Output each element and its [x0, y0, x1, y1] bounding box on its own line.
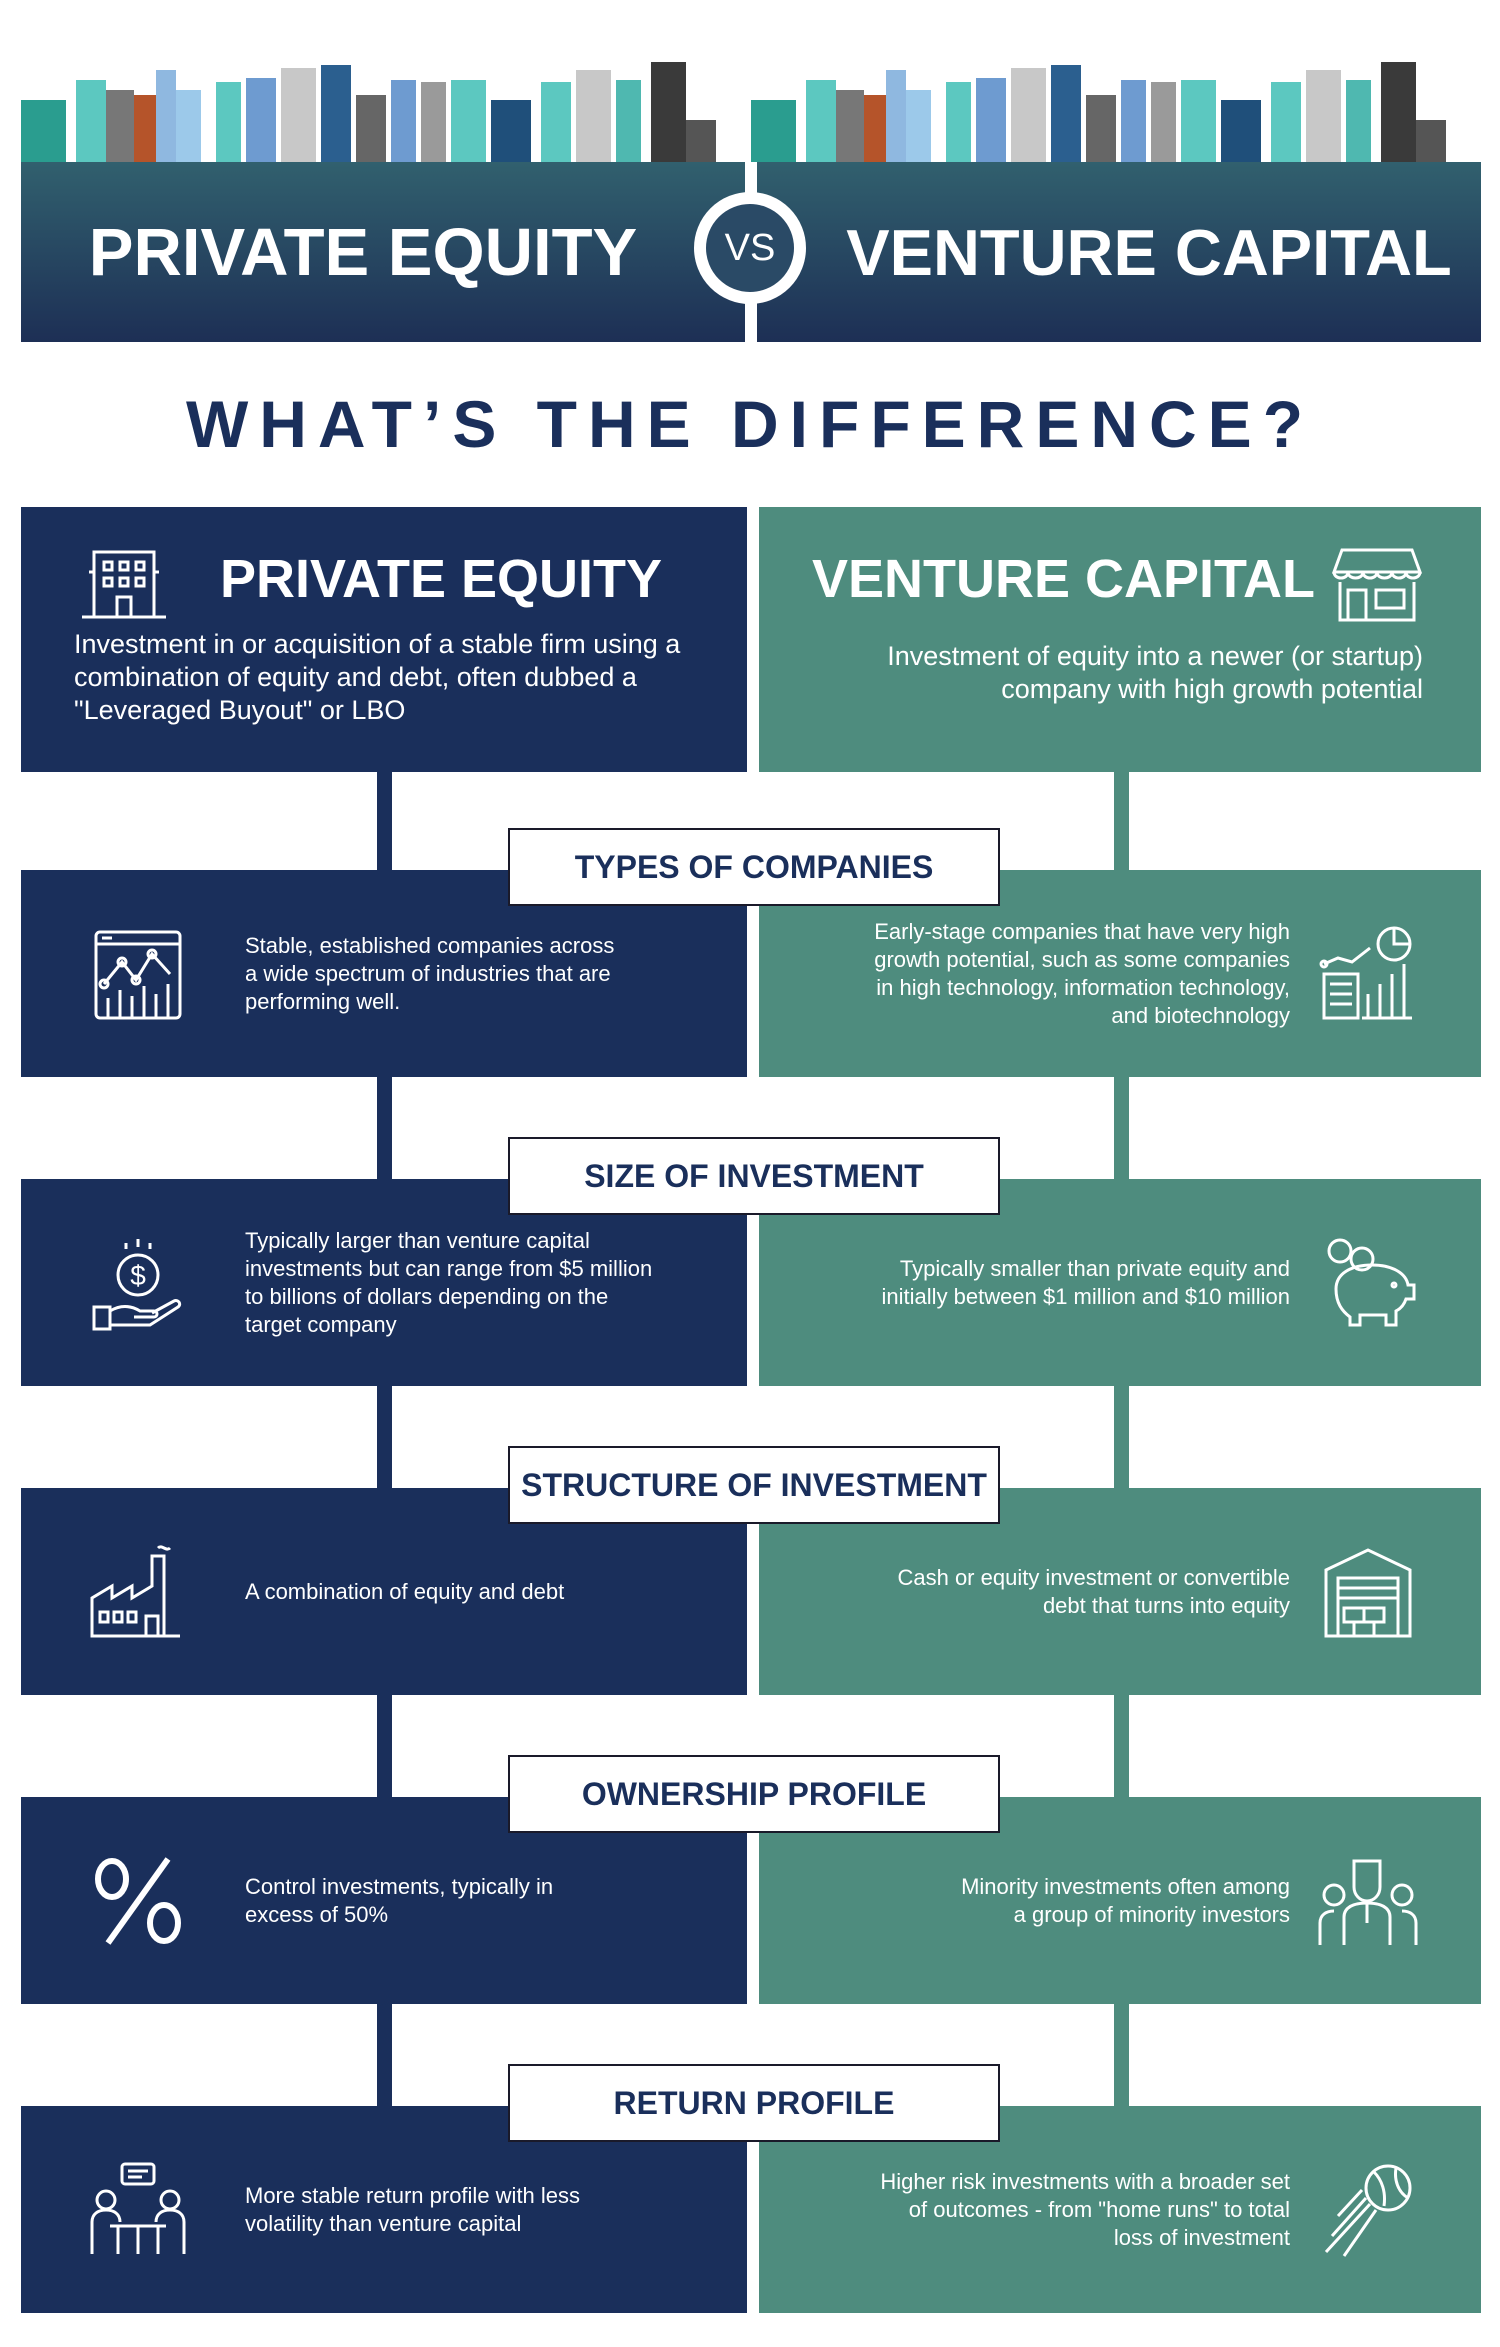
text: performing well. [245, 988, 400, 1014]
icon: analytics dashboard [94, 930, 182, 1020]
banner right: venture capital [757, 162, 1481, 342]
panel: private equity intro [21, 507, 747, 772]
panel: PE return [21, 2106, 747, 2313]
text [882, 1256, 1290, 1308]
icon: office building [82, 550, 166, 618]
heading: WHAT’S THE DIFFERENCE? [186, 387, 1314, 461]
icon: hand with coin [92, 1239, 182, 1330]
description: Investment of equity into a newer (or startup) [887, 641, 1423, 671]
text: to billions of dollars depending on the [245, 1284, 608, 1308]
label: TYPES OF COMPANIES [575, 848, 933, 884]
panel: VC return [759, 2106, 1481, 2313]
panel: venture capital intro [759, 507, 1481, 772]
panel: PE types [21, 870, 747, 1077]
title: VENTURE CAPITAL [812, 549, 1315, 609]
label [508, 1137, 1000, 1215]
icon: group of people [1318, 1860, 1418, 1945]
text [245, 932, 614, 1014]
connectors [377, 770, 392, 2110]
text: Minority investments often among [961, 1874, 1290, 1898]
text: Early-stage companies that have very high [874, 918, 1290, 944]
section: types of companies [21, 828, 1481, 1077]
icon: factory [90, 1545, 180, 1638]
icon: growth chart [1320, 926, 1412, 1020]
text: debt that turns into equity [1043, 1592, 1290, 1618]
text: Higher risk investments with a broader set [880, 2168, 1290, 2194]
text: initially between $1 million and $10 million [882, 1284, 1290, 1308]
panel: PE structure [21, 1488, 747, 1695]
section: return profile [21, 2064, 1481, 2313]
text: Typically smaller than private equity and [900, 1256, 1290, 1280]
text: volatility than venture capital [245, 2210, 521, 2236]
label [508, 1755, 1000, 1833]
text: a group of minority investors [1014, 1902, 1290, 1926]
description: Investment in or acquisition of a stable firm using a [74, 629, 680, 659]
label: SIZE OF INVESTMENT [584, 1158, 924, 1194]
text [245, 2182, 580, 2236]
text [874, 918, 1290, 1028]
section: ownership profile [21, 1755, 1481, 2004]
banner right: venture capital: VENTURE CAPITAL [846, 216, 1452, 288]
text: and biotechnology [1111, 1002, 1290, 1028]
panel: PE size [21, 1179, 747, 1386]
label: STRUCTURE OF INVESTMENT [521, 1466, 987, 1502]
section: size of investment [21, 1137, 1481, 1386]
text: in high technology, information technology, [876, 974, 1290, 1000]
icon: meeting [90, 2162, 186, 2254]
icon: percent [95, 1857, 181, 1945]
label: OWNERSHIP PROFILE [582, 1776, 926, 1812]
title: PRIVATE EQUITY [220, 549, 662, 609]
text: excess of 50% [245, 1902, 388, 1926]
description [887, 641, 1423, 704]
description: combination of equity and debt, often dubbed a [74, 662, 637, 692]
text: A combination of equity and debt [245, 1578, 564, 1604]
description: company with high growth potential [1001, 674, 1423, 704]
text: Cash or equity investment or convertible [897, 1564, 1290, 1590]
section: structure of investment [21, 1446, 1481, 1695]
panel: VC types [759, 870, 1481, 1077]
icon: hand with coin: $ [130, 1260, 146, 1290]
panel: VC ownership [759, 1797, 1481, 2004]
text: Stable, established companies across [245, 932, 614, 958]
icon: storefront [1332, 548, 1422, 622]
text: More stable return profile with less [245, 2182, 580, 2208]
description: "Leveraged Buyout" or LBO [74, 695, 405, 725]
text: a wide spectrum of industries that are [245, 960, 611, 986]
text [880, 2168, 1290, 2250]
icon: warehouse [1324, 1548, 1412, 1638]
text [897, 1564, 1290, 1618]
text [961, 1874, 1290, 1926]
panel: VC structure [759, 1488, 1481, 1695]
text: growth potential, such as some companies [874, 946, 1290, 972]
icon: piggy bank [1328, 1238, 1416, 1326]
skyline [21, 62, 1446, 162]
panel: VC size [759, 1179, 1481, 1386]
icon: baseball [1325, 2164, 1412, 2257]
text: investments but can range from $5 million [245, 1256, 652, 1280]
label [508, 1446, 1000, 1524]
text [245, 1874, 553, 1926]
label [508, 828, 1000, 906]
label [508, 2064, 1000, 2142]
banner left: private equity [21, 162, 745, 342]
text: of outcomes - from "home runs" to total [909, 2196, 1290, 2222]
description [74, 629, 680, 725]
text: target company [245, 1312, 397, 1336]
banner left: private equity: PRIVATE EQUITY [89, 214, 637, 290]
text: Typically larger than venture capital [245, 1228, 590, 1252]
vs circle: VS [725, 226, 775, 268]
header banner [21, 162, 1481, 342]
panel: PE ownership [21, 1797, 747, 2004]
text [245, 1228, 652, 1336]
vs circle [694, 192, 806, 304]
label: RETURN PROFILE [614, 2084, 894, 2120]
text: Control investments, typically in [245, 1874, 553, 1898]
text: loss of investment [1114, 2224, 1290, 2250]
